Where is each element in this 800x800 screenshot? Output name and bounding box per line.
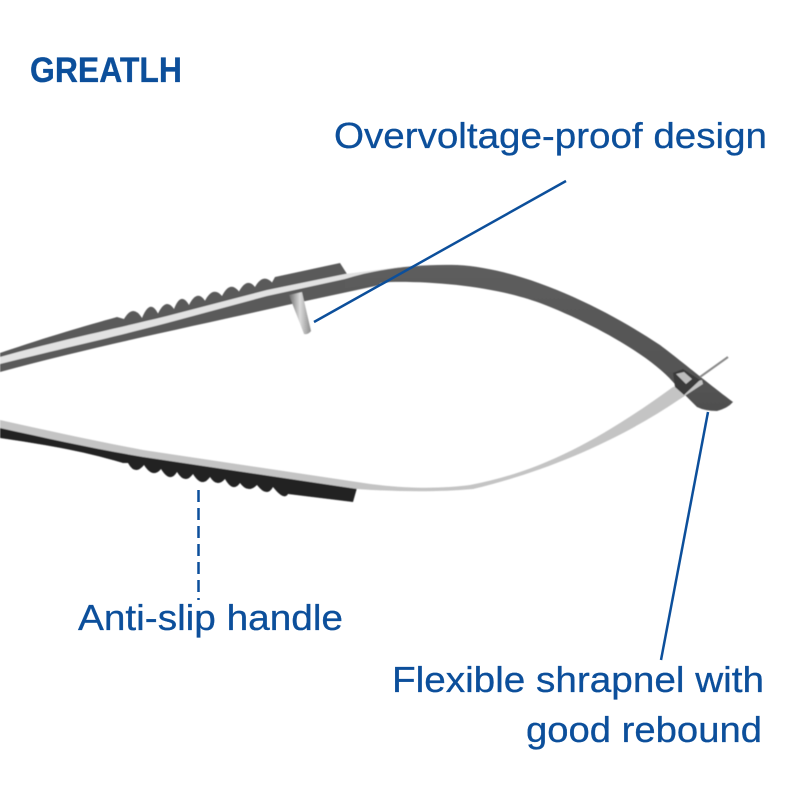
leader line: flexible shrapnel — [661, 412, 708, 660]
upper arm with serrated grip — [0, 263, 733, 411]
overvoltage pin — [289, 292, 311, 334]
label: flexible shrapnel with good rebound: good rebound — [526, 709, 762, 750]
leader line: overvoltage-proof design — [314, 181, 566, 322]
label: overvoltage-proof design: Overvoltage-proof design — [334, 115, 767, 156]
lower arm with serrated grip — [0, 380, 703, 502]
needle tip — [700, 357, 728, 377]
hinge joint — [673, 369, 700, 395]
label: anti-slip handle: Anti-slip handle — [78, 597, 343, 638]
scissors illustration — [0, 263, 733, 502]
upper arm highlight — [0, 267, 420, 364]
lower arm dark edge — [0, 427, 357, 502]
lower arm blade — [0, 380, 703, 491]
upper spring blade — [345, 265, 733, 411]
brand logo: GREATLH — [30, 51, 182, 90]
label: flexible shrapnel with good rebound — [392, 659, 764, 750]
leader line: anti-slip handle — [197, 490, 200, 600]
label: flexible shrapnel with good rebound: Flexible shrapnel with — [392, 659, 764, 700]
